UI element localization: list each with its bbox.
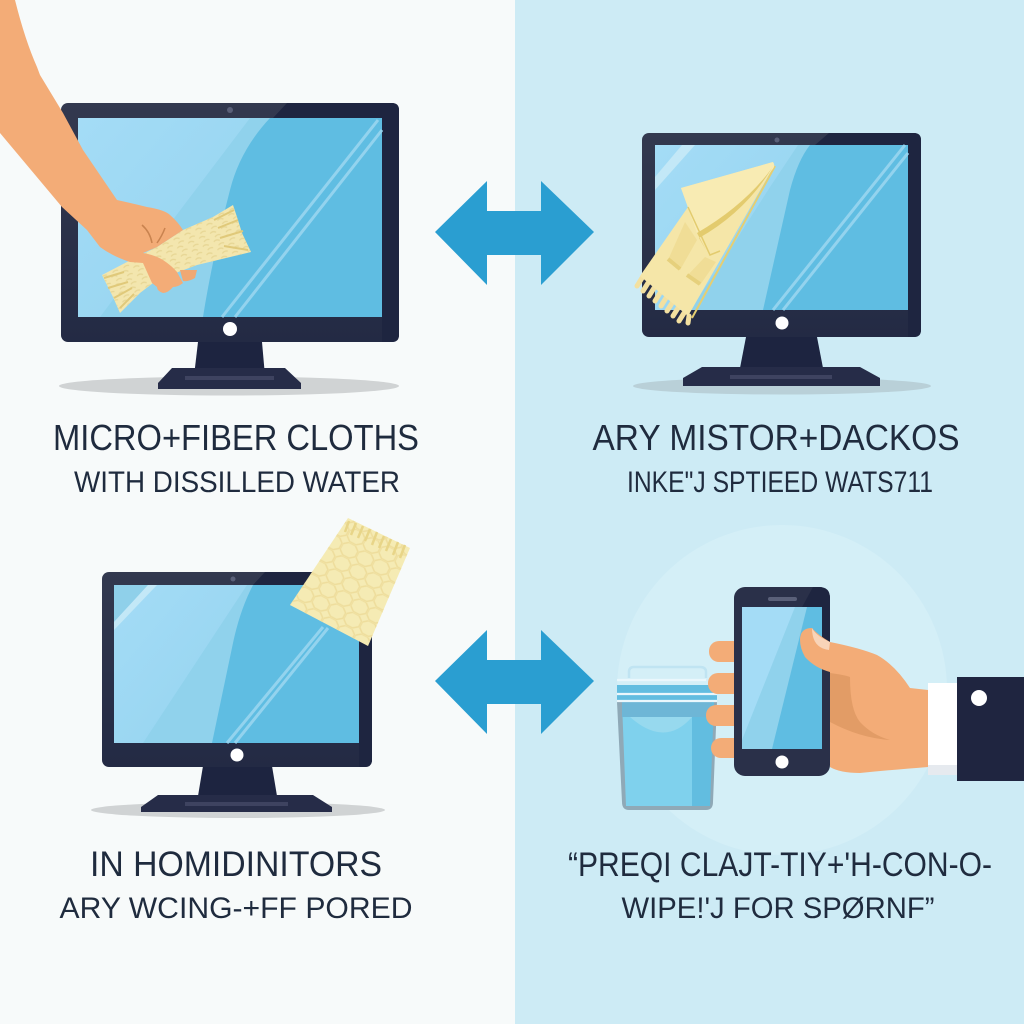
icon: phone bbox=[734, 587, 830, 776]
arrow: bottom double arrow bbox=[435, 630, 594, 734]
icon: pale glow circle bbox=[617, 525, 947, 855]
icon: shirt cuff and sleeve bbox=[928, 677, 1024, 781]
text: bottom left caption bbox=[60, 845, 412, 925]
text: top right caption: ARY MISTOR+DACKOS bbox=[592, 417, 960, 458]
monitor: top right bbox=[633, 133, 931, 394]
text: bottom right caption: WIPE!'J FOR SPØRNF” bbox=[622, 892, 934, 925]
text: bottom left caption: ARY WCING-+FF PORED bbox=[60, 892, 412, 925]
icon: hand holding phone bbox=[800, 628, 928, 773]
panel: right background bbox=[515, 0, 1024, 1024]
text: bottom right caption bbox=[568, 846, 992, 925]
arrow: top double arrow bbox=[435, 181, 594, 285]
text: top right caption bbox=[592, 417, 960, 499]
monitor: bottom left bbox=[91, 572, 385, 818]
icon: folded cloth top right bbox=[637, 162, 775, 323]
icon: water glass bbox=[617, 667, 717, 810]
panel: left background bbox=[0, 0, 515, 1024]
text: top right caption: INKE"J SPTIEED WATS711 bbox=[627, 466, 933, 499]
icon: fingers behind phone bbox=[706, 641, 744, 758]
icon: cloth top left bbox=[102, 205, 251, 313]
text: top left caption bbox=[53, 417, 419, 499]
icon: arm and hand top left bbox=[0, 0, 197, 293]
text: bottom left caption: IN HOMIDINITORS bbox=[90, 845, 382, 884]
icon: cloth bottom left bbox=[290, 518, 410, 646]
text: top left caption: WITH DISSILLED WATER bbox=[74, 466, 400, 499]
monitor: top left bbox=[59, 103, 399, 396]
text: top left caption: MICRO+FIBER CLOTHS bbox=[53, 417, 419, 458]
